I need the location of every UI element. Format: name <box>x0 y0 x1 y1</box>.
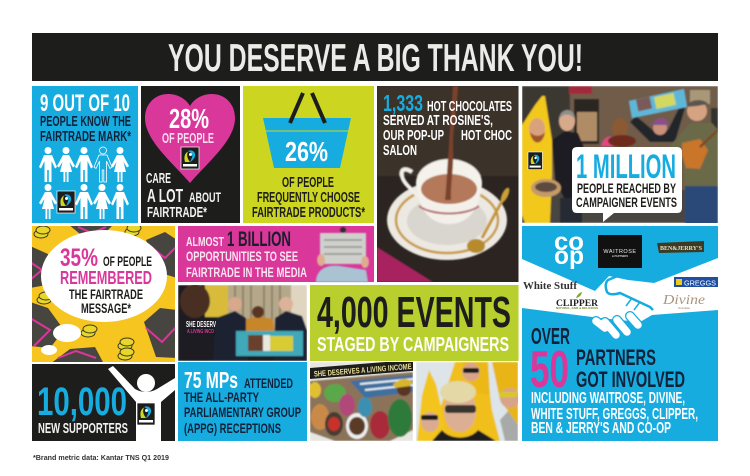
logo: waitrose: & PARTNERS <box>612 255 628 258</box>
thought bubble <box>41 230 167 355</box>
stat text: MESSAGE* <box>81 300 131 316</box>
logo: co-op <box>554 228 584 270</box>
stat text: THE FAIRTRADE <box>69 286 143 302</box>
callout: 1 million: PEOPLE REACHED BY <box>577 180 676 196</box>
icon: people figures <box>39 147 129 219</box>
stat text <box>383 90 512 159</box>
panel: hot chocolates <box>377 86 518 282</box>
panel: 75 MPs <box>178 362 307 441</box>
photo: person reading newspaper <box>316 227 369 282</box>
logo: co-op: co <box>554 228 584 256</box>
panel: over 50 partners <box>522 226 718 441</box>
callout: 1 million: 1 MILLION <box>576 148 676 186</box>
logo: greggs <box>674 277 718 288</box>
photo: campaigner mural <box>307 360 416 441</box>
stat description: PEOPLE KNOW THE <box>40 114 131 130</box>
logo: waitrose <box>598 235 642 268</box>
panel: 75 MPs: PARLIAMENTARY GROUP <box>184 404 301 420</box>
stat text: ALMOST <box>186 234 224 249</box>
poster text <box>186 321 216 333</box>
stat description: CARE <box>146 171 171 187</box>
stat text: SALON <box>383 143 417 159</box>
icon: supporter figure <box>108 366 175 441</box>
logo: waitrose: WAITROSE <box>603 249 637 255</box>
stat text: OVER <box>531 323 570 349</box>
panel: 4,000 events: STAGED BY CAMPAIGNERS <box>317 333 509 356</box>
panel: 75 MPs: 75 MPs <box>184 367 238 393</box>
stat description: FAIRTRADE* <box>147 205 207 221</box>
stat text: REMEMBERED <box>60 267 152 288</box>
illustration: purses and coins <box>30 224 177 364</box>
stat heading: 28% <box>169 103 209 134</box>
poster text: SHE DESERV <box>186 320 216 329</box>
callout: 1 million: CAMPAIGNER EVENTS <box>576 194 677 210</box>
panel: 75 MPs: ATTENDED <box>244 375 293 391</box>
poster text: A LIVING INCO <box>187 329 214 335</box>
logo: clipper <box>556 292 599 310</box>
stat text: OPPORTUNITIES TO SEE <box>186 248 298 264</box>
stat text: BEN & JERRY'S AND CO-OP <box>531 420 671 437</box>
panel: 28 percent care <box>141 86 240 223</box>
stat description: A LOT <box>147 185 183 206</box>
stat text: OF PEOPLE <box>103 253 152 269</box>
panel: 35 percent remembered <box>30 224 177 364</box>
panel: 26 percent basket <box>243 86 374 223</box>
icon: heart <box>145 94 235 183</box>
logo: ben and jerry's <box>657 241 704 253</box>
icon: fairtrade mark <box>181 147 199 169</box>
panel: 1 million campaigner photo <box>522 86 718 224</box>
panel: 4,000 events <box>310 285 518 361</box>
panel: 1 billion media <box>178 226 374 282</box>
photo: MPs with campaigner <box>178 284 307 361</box>
stat text: SERVED AT ROSINE'S, <box>383 113 493 129</box>
photo: banana costumes <box>416 362 520 441</box>
icon: fairtrade mark on banana <box>528 152 542 170</box>
stat text: HOT CHOCOLATES <box>427 99 512 115</box>
logo: divine: Divine <box>662 293 705 308</box>
stat description: OF PEOPLE <box>282 175 334 191</box>
stat description: FREQUENTLY CHOOSE <box>257 190 360 206</box>
stat heading: 26% <box>285 136 328 167</box>
panel: 75 MPs: THE ALL-PARTY <box>184 389 259 405</box>
logo: clipper: NATURAL, FAIR & DELICIOUS <box>556 306 598 310</box>
panel: 4,000 events: 4,000 EVENTS <box>317 288 511 337</box>
icon: fairtrade mark <box>57 191 75 213</box>
logo: white stuff: White Stuff <box>523 281 578 292</box>
stat text: OUR POP-UP <box>383 128 444 144</box>
photo: hot chocolate cup <box>377 86 518 282</box>
callout: 1 million <box>572 147 682 222</box>
stat description: FAIRTRADE PRODUCTS* <box>252 205 365 221</box>
footnote: *Brand metric data: Kantar TNS Q1 2019 <box>33 455 169 462</box>
title banner <box>32 33 718 81</box>
stat text: PARTNERS <box>576 345 656 370</box>
illustration: handshake band <box>522 258 718 335</box>
mural banner: SHE DESERVES A LIVING INCOME <box>314 362 412 379</box>
panel: 10,000 supporters <box>32 364 175 441</box>
stat text: 50 <box>530 341 569 399</box>
logo: divine: chocolate <box>678 306 690 310</box>
stat heading: 10,000 <box>37 380 127 424</box>
stat description <box>40 114 131 145</box>
stat description: ABOUT <box>189 190 221 205</box>
stat sub-heading: OF PEOPLE <box>162 131 214 147</box>
stat text: GOT INVOLVED <box>576 367 685 392</box>
stat description <box>252 175 365 221</box>
panel: 75 MPs: (APPG) RECEPTIONS <box>184 420 281 436</box>
stat text <box>530 323 698 437</box>
photo: campaigners <box>522 86 718 224</box>
logo: greggs: GREGGS <box>684 278 716 288</box>
stat heading: 9 OUT OF 10 <box>40 90 130 117</box>
stat text: FAIRTRADE IN THE MEDIA <box>186 264 307 280</box>
panel: 9 out of 10 <box>32 86 138 223</box>
logo: clipper: CLIPPER <box>556 298 599 308</box>
stat text: HOT CHOC <box>461 128 512 144</box>
stat text: 35% <box>60 244 98 272</box>
icon: shopping basket <box>263 93 351 168</box>
stat description <box>146 171 221 221</box>
stat description: FAIRTRADE MARK* <box>40 129 131 145</box>
logo: co-op: op <box>554 242 584 270</box>
stat text: 1,333 <box>383 90 423 116</box>
stat text: 1 BILLION <box>227 228 291 251</box>
logo: ben and jerry's: BEN&JERRY'S <box>660 245 702 252</box>
stat text <box>60 244 152 316</box>
stat text <box>186 228 307 280</box>
stat description: NEW SUPPORTERS <box>38 421 128 437</box>
